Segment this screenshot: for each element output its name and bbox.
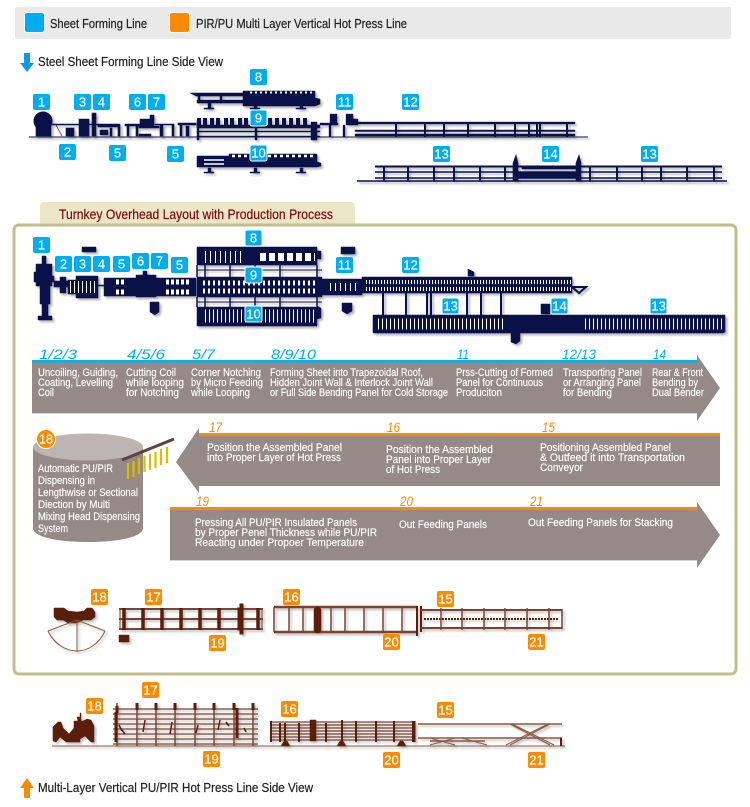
cylinder: PU/PIR dispensing callout: Mixing Head Dispensing	[38, 511, 140, 523]
hot press number badges, orange: 17	[146, 590, 161, 604]
overhead number badges, blue: 5	[176, 258, 183, 272]
process arrow: pressing and outfeed steps: 21	[529, 493, 543, 509]
process arrow: panel positioning steps: Position the Assembled Panel	[207, 442, 342, 454]
process arrow: pressing and outfeed steps: 19	[196, 493, 209, 509]
process arrow: panel positioning steps: 17	[209, 419, 223, 435]
process arrow: sheet forming steps: Uncoiling, Guiding,	[38, 367, 118, 379]
overhead number badges, blue: 5	[118, 256, 125, 272]
process arrow: sheet forming steps: 1/2/3	[39, 346, 77, 362]
panel: overhead layout frame	[14, 225, 736, 674]
machine 9	[197, 120, 320, 140]
overhead number badges, blue: 11	[338, 258, 351, 272]
overhead number badges, blue: 3	[79, 256, 86, 272]
hot press number badges, orange: 16	[284, 590, 299, 604]
process arrow: pressing and outfeed steps: 20	[399, 493, 413, 509]
overhead number badges, blue: 4	[98, 256, 105, 272]
heading: steel sheet forming line side view: Steel Sheet Forming Line Side View	[38, 54, 224, 69]
process arrow: sheet forming steps: 11	[457, 346, 469, 362]
cylinder: PU/PIR dispensing callout: Automatic PU/PIR	[38, 463, 113, 475]
overhead number badges, blue: 8	[250, 230, 257, 246]
heading: steel sheet forming line side view	[20, 53, 224, 72]
side view number badges, blue: 11	[338, 94, 351, 110]
side view number badges, blue: 9	[255, 110, 262, 126]
process arrow: sheet forming steps: Hidden Joint Wall & Interlock Joint Wall	[270, 377, 433, 389]
process arrow: sheet forming steps: Produciton	[456, 387, 502, 399]
hot press number badges, orange: 19	[204, 752, 219, 766]
legend bar: PIR/PU Multi Layer Vertical Hot Press Line	[196, 16, 407, 31]
process arrow: panel positioning steps: Position the Assembled	[386, 444, 493, 456]
dispensing head	[122, 439, 174, 479]
process arrow: sheet forming steps: Cutting Coil	[126, 367, 176, 379]
section tab: overhead layout title	[40, 202, 355, 226]
process arrow: sheet forming steps: 8/9/10	[271, 346, 316, 362]
overhead number badges, blue: 9	[250, 268, 257, 282]
machine 8	[190, 91, 320, 106]
process arrow: pressing and outfeed steps	[170, 493, 720, 568]
process arrow: sheet forming steps: or Arranging Panel	[563, 377, 641, 389]
side view number badges, blue: 7	[153, 94, 160, 110]
process arrow: sheet forming steps: Prss-Cutting of Formed	[456, 367, 553, 379]
process arrow: pressing and outfeed steps: Pressing All PU/PIR Insulated Panels	[195, 517, 357, 529]
process arrow: panel positioning steps: Positioning Assembled Panel	[540, 442, 671, 454]
process arrow: sheet forming steps: Rear & Front	[652, 367, 703, 379]
overhead number badges, blue: 10	[246, 306, 261, 322]
machine 11 and 12	[320, 114, 575, 137]
process arrow: pressing and outfeed steps: Out Feeding Panels for Stacking	[528, 517, 673, 529]
process arrow: sheet forming steps: Bending by	[652, 377, 698, 389]
heading: multi-layer hot press line side view: Multi-Layer Vertical PU/PIR Hot Press Line Side View	[38, 780, 314, 795]
drawing: overhead layout of sheet forming line	[34, 247, 725, 344]
side view number badges, blue: 1	[38, 94, 45, 110]
legend bar	[15, 7, 731, 39]
side view number badges, blue: 5	[172, 146, 179, 162]
machines 13 and 14	[357, 180, 727, 182]
side view number badges, blue: 10	[251, 146, 266, 160]
hot press number badges, orange: 20	[384, 752, 399, 768]
process arrow: sheet forming steps: Transporting Panel	[563, 367, 642, 379]
cylinder: PU/PIR dispensing callout: Lengthwise or Sectional	[38, 487, 138, 499]
overhead number badges, blue: 7	[156, 254, 163, 268]
overhead number badges, blue: 1	[38, 238, 45, 252]
overhead number badges, blue	[33, 230, 667, 322]
side view number badges, blue: 4	[98, 94, 105, 110]
side view number badges, blue: 13	[434, 146, 449, 162]
process arrow: sheet forming steps: 4/5/6	[127, 346, 165, 362]
cylinder: PU/PIR dispensing callout: Diection by Multi	[38, 499, 110, 511]
process arrow: panel positioning steps: 15	[542, 419, 555, 435]
hot press number badges, orange: 15	[438, 702, 453, 718]
process arrow: sheet forming steps: 5/7	[192, 346, 216, 362]
process arrow: sheet forming steps: Corner Notching	[191, 367, 261, 379]
hot press number badges, orange: 17	[143, 682, 158, 698]
hot press number badges, orange: 21	[529, 752, 544, 768]
cylinder: PU/PIR dispensing callout: System	[38, 523, 68, 535]
drawing: overhead layout of hot press line	[48, 604, 562, 652]
legend bar: Sheet Forming Line	[50, 16, 147, 31]
process arrow: sheet forming steps: for Bending	[563, 387, 612, 399]
process arrow: sheet forming steps: Dual Bender	[652, 387, 704, 399]
process arrow: sheet forming steps: Coil	[38, 387, 54, 399]
side view number badges, blue: 13	[642, 146, 657, 162]
hot press number badges, orange: 21	[529, 634, 544, 650]
drawing: hot press line side view	[52, 703, 565, 746]
side view number badges, blue: 12	[403, 94, 418, 110]
side view number badges, blue: 14	[543, 146, 558, 162]
overhead number badges, blue: 13	[443, 298, 458, 314]
process arrow: panel positioning steps: into Proper Layer of Hot Press	[207, 452, 341, 464]
side view number badges, blue: 3	[79, 94, 86, 110]
side view number badges, blue: 6	[134, 94, 141, 110]
hot press number badges, orange: 15	[438, 592, 453, 606]
overhead number badges, blue: 2	[60, 256, 67, 272]
process arrow: sheet forming steps: 12/13	[562, 346, 596, 362]
process arrow: sheet forming steps: while Looping	[190, 387, 250, 399]
heading: multi-layer hot press line side view	[20, 778, 314, 798]
process arrow: panel positioning steps: of Hot Press	[386, 464, 440, 476]
process arrow: pressing and outfeed steps: Out Feeding Panels	[399, 519, 487, 531]
section tab: overhead layout title: Turnkey Overhead Layout with Production Process	[59, 206, 333, 222]
badge 18 circle	[36, 430, 56, 448]
process arrow: sheet forming steps: 14	[653, 346, 666, 362]
overhead number badges, blue: 13	[651, 298, 666, 314]
hot press number badges, orange: 18	[87, 698, 102, 714]
hot press number badges, orange	[86, 589, 545, 768]
process arrow: sheet forming steps	[32, 346, 720, 421]
process arrow: sheet forming steps: by Micro Feeding	[191, 377, 263, 389]
main line 11/12	[322, 277, 572, 295]
process arrow: sheet forming steps: or Full Side Bending Panel for Cold Storage	[270, 387, 448, 399]
process arrow: panel positioning steps: & Outfeed it into Transportation	[540, 452, 685, 464]
overhead number badges, blue: 12	[403, 258, 418, 272]
process arrow: sheet forming steps: Panel for Continuous	[456, 377, 543, 389]
side view number badges, blue	[33, 69, 658, 162]
process arrow: panel positioning steps: Conveyor	[540, 462, 583, 474]
machine 10	[197, 154, 321, 167]
cylinder: PU/PIR dispensing callout: Dispensing in	[38, 475, 95, 487]
process arrow: sheet forming steps: Coating, Levelling	[38, 377, 113, 389]
process arrow: panel positioning steps: Panel into Proper Layer	[386, 454, 491, 466]
hot press number badges, orange: 20	[384, 634, 399, 650]
hot press number badges, orange: 16	[282, 702, 297, 716]
side view number badges, blue: 8	[255, 70, 262, 84]
cylinder: PU/PIR dispensing callout	[33, 430, 174, 542]
drawing: forming line side view, upper row	[29, 91, 727, 181]
hot press number badges, orange: 19	[210, 636, 225, 650]
process arrow: sheet forming steps: for Notching	[126, 387, 179, 399]
process arrow: sheet forming steps: Forming Sheet into Trapezoidal Roof,	[270, 367, 423, 379]
side view number badges, blue: 5	[114, 146, 121, 160]
hot press number badges, orange: 18	[92, 590, 107, 604]
process arrow: panel positioning steps	[176, 419, 720, 493]
process arrow: pressing and outfeed steps: by Proper Penel Thickness while PU/PIR	[195, 527, 377, 539]
side view number badges, blue: 2	[64, 144, 71, 160]
overhead number badges, blue: 14	[552, 298, 567, 314]
badge 18 circle: 18	[39, 432, 53, 446]
overhead number badges, blue: 6	[137, 254, 144, 268]
process arrow: sheet forming steps: while looping	[125, 377, 184, 389]
process arrow: panel positioning steps: 16	[387, 419, 400, 435]
forming block 8/9/10	[197, 247, 321, 265]
process arrow: pressing and outfeed steps: Reacting under Propoer Temperature	[195, 537, 364, 549]
